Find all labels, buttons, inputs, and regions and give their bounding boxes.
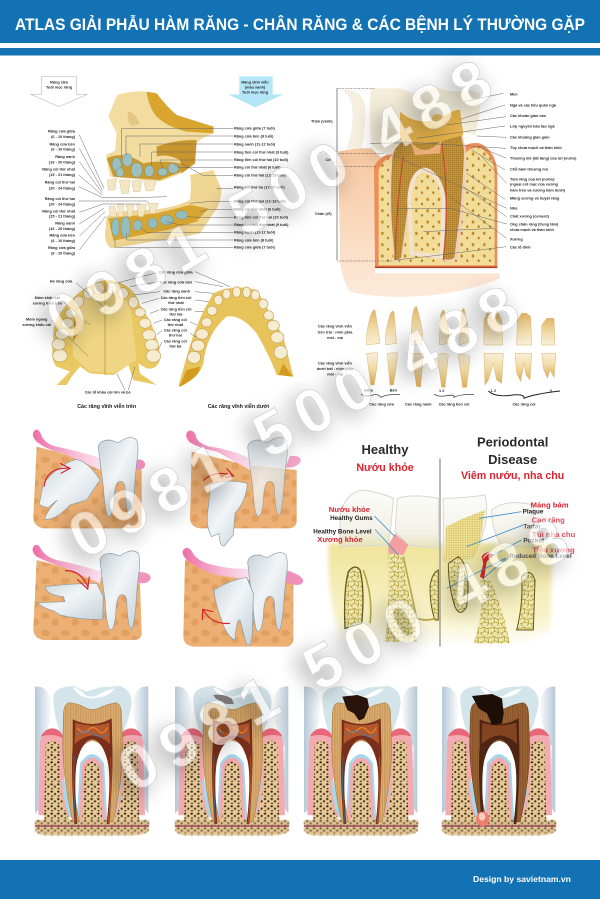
labels: cross-section left (311, 119, 333, 216)
labels: primary teeth: (16 - 20 tháng) (49, 227, 76, 231)
labels: tooth rows: Bên (390, 388, 398, 392)
panel: upper and lower dental arches (22, 270, 293, 410)
illustration: gum and jaw base (338, 148, 500, 297)
illustration: impaction case 4 (183, 548, 303, 647)
labels: permanent teeth: Răng cối thứ hai (12-13 tuổi) (234, 200, 286, 204)
labels: permanent teeth: Răng tiền cối thứ nhất (9 tuổi) (234, 150, 289, 154)
labels: healthy: Nướu khỏe (329, 505, 370, 514)
labels: arch teeth: thứ ba (169, 345, 182, 349)
labels: periodontal: Mảng bám (531, 500, 569, 509)
labels: periodontal: Plaque (523, 508, 544, 515)
labels: maxilla left: xương khẩu cái (22, 323, 51, 327)
watermark line 3: 0981 500 488 (108, 500, 590, 805)
header banner (0, 0, 600, 56)
illustration: healthy teeth (340, 490, 438, 642)
labels: permanent teeth: Răng tiền cối thứ hai (10 tuổi) (234, 215, 289, 219)
labels: permanent teeth: Răng cối thứ nhất (6 tuổi) (234, 207, 281, 211)
arrow: rotation (203, 468, 233, 481)
labels: primary teeth: Răng cối thứ nhất (42, 168, 76, 172)
panel: individual permanent teeth (317, 307, 560, 407)
labels: cross-section right: Tấm răng của lợi (nướu) (510, 177, 555, 181)
labels: primary teeth: (20 - 24 tháng) (49, 186, 76, 190)
labels: periodontal (509, 500, 576, 560)
labels: tooth rows: Các răng nanh (405, 403, 432, 407)
labels: cross-section right: Màng xương và huyệt răng (510, 197, 560, 201)
labels: periodontal: Cao răng (532, 515, 565, 524)
labels: cross-section right: Ống chân răng (trung tâm) (510, 221, 559, 226)
labels: cross-section right: Ngà và các tiểu quản ngà (510, 104, 557, 108)
labels: tooth rows: 1 2 (491, 389, 496, 393)
labels: arch teeth: Các răng tiền cối (161, 296, 191, 300)
labels: primary teeth: Răng cối thứ hai (45, 197, 75, 201)
labels: primary teeth: Răng cửa bên (49, 234, 76, 238)
labels: permanent teeth: Răng cửa giữa (7 tuổi) (234, 246, 276, 250)
watermark phone number (35, 41, 590, 805)
labels: arch teeth: Các răng cửa bên (160, 280, 193, 284)
labels: arch teeth: Các răng cối (164, 340, 187, 344)
labels: primary teeth: (15 - 21 tháng) (49, 215, 76, 219)
labels: cross-section right (510, 93, 577, 250)
illustration: mandible (105, 170, 222, 248)
illustration: impaction case 3 (33, 545, 151, 640)
watermark line 2: 0981 500 488 (58, 267, 540, 572)
labels: primary teeth: Răng cửa bên (49, 142, 76, 146)
labels: cross-section right: Chỗ bám thượng mô (510, 167, 549, 171)
arrow: rotation (65, 571, 89, 589)
arrow: permanent teeth: Tuổi mọc răng (242, 91, 269, 95)
illustration: upper teeth row (367, 307, 555, 345)
labels: cross-section right: Các khoản gian cầu (510, 114, 547, 118)
labels: healthy: Healthy Bone Level (313, 529, 372, 536)
illustration: healthy tooth section (35, 686, 149, 835)
labels: permanent teeth: Răng cửa giữa (7 tuổi) (234, 127, 276, 131)
arrow: permanent teeth (228, 76, 283, 107)
labels: maxilla left (22, 280, 73, 327)
labels: arch teeth: thứ nhất (168, 301, 184, 305)
labels: primary teeth: Răng nanh (55, 221, 76, 225)
labels: cross-section right: Men (510, 93, 518, 97)
labels: arch teeth: Các lỗ khẩu cái lớn và bé (85, 390, 131, 394)
illustration: tooth root (390, 127, 466, 262)
illustration: maxilla (52, 280, 161, 385)
labels: periodontal: Pocket (523, 538, 545, 545)
labels: cross-section right: chứa mạch và thần kinh (510, 228, 554, 232)
labels: primary teeth: Răng nanh (55, 155, 76, 159)
arrow: primary teeth: Răng sữa (50, 80, 69, 84)
arrow: rotation (202, 609, 230, 623)
labels: primary teeth: Răng cửa giữa (48, 130, 76, 134)
labels: periodontal: Reduced Bone Level (509, 553, 572, 560)
illustration: neighbouring tooth (342, 90, 365, 148)
caption: upper arch: Các răng vĩnh viễn trên (77, 403, 136, 410)
labels: permanent teeth: Răng nanh (11-12 tuổi) (234, 230, 276, 234)
labels: cross-section right: Nhú (510, 206, 518, 210)
illustration: impaction case 2 (186, 431, 301, 546)
labels: permanent teeth: Răng cối thứ hai (12-13 tuổi) (234, 174, 286, 178)
labels: primary teeth: Răng cửa giữa (48, 246, 76, 250)
labels: tooth rows: Giữa (364, 388, 374, 392)
brace (361, 391, 560, 398)
labels: tooth rows: Các răng vĩnh viễn (318, 362, 353, 366)
footer credit: Design by savietnam.vn (473, 874, 571, 884)
labels: cross-section right: (ngoại cốt mạc của xương (510, 182, 559, 186)
labels: tooth rows: dưới trái : nhìn phía (317, 367, 354, 371)
labels: cross-section right: Các lỗ đỉnh (510, 246, 531, 250)
labels: cross-section right: Thượng mô (tất tầng) của lợi (nướu) (510, 156, 577, 160)
arrow: permanent teeth: Răng vĩnh viễn (241, 80, 269, 84)
labels: primary teeth: (6 - 10 tháng) (51, 239, 76, 243)
panel: tooth cross-section anatomy (311, 87, 577, 297)
labels: arch teeth: Các răng cối (164, 329, 187, 333)
footer banner (0, 860, 600, 899)
labels: permanent teeth: Răng cửa bên (8 tuổi) (234, 134, 274, 138)
labels: arch teeth: Các răng cửa giữa (159, 270, 193, 274)
illustration: gum and bone layers (374, 143, 497, 267)
labels: arch teeth: thứ hai (169, 333, 182, 337)
panel: caries stages (35, 686, 556, 835)
illustration: periodontal teeth (443, 495, 535, 643)
heading: healthy: Healthy (362, 442, 409, 457)
leader lines (374, 512, 523, 588)
watermark line 1: 0981 500 488 (35, 41, 513, 354)
labels: permanent teeth: Răng cối thứ ba (17-25 tuổi) (234, 186, 285, 190)
illustration: pulp necrosis and abscess (442, 686, 556, 835)
labels: arch teeth (85, 270, 193, 394)
labels: maxilla left: Hố răng cửa (50, 280, 73, 284)
labels: primary teeth: (6 - 10 tháng) (51, 135, 76, 139)
labels: tooth rows: Các răng cửa (369, 403, 395, 407)
labels: healthy (313, 505, 373, 544)
labels: periodontal: Tartar (523, 523, 541, 530)
heading: healthy (356, 442, 414, 474)
arrow: primary teeth (31, 76, 87, 107)
labels: tooth rows: Các răng cối (513, 403, 535, 407)
labels: maxilla left: Mỏm ngang (26, 318, 48, 322)
illustration: impaction case 1 (33, 430, 145, 528)
arrow: permanent teeth: (màu xanh) (245, 85, 266, 89)
labels: tooth rows: 1 2 (439, 389, 444, 393)
labels: cross-section left: Thân (vành) (311, 119, 333, 123)
labels: primary teeth: Răng cối thứ hai (45, 181, 75, 185)
caption: lower arch: Các răng vĩnh viễn dưới (208, 403, 269, 410)
labels: tooth rows: môi - má (327, 336, 344, 340)
labels: arch teeth: Các răng nanh (163, 289, 191, 293)
brackets and dashed levels (337, 88, 393, 261)
panel: healthy vs periodontal disease (313, 435, 576, 647)
arrow: primary teeth: Tuổi mọc răng (46, 86, 73, 90)
labels: periodontal: Tiêu xương (532, 545, 575, 554)
labels: healthy: Xương khỏe (317, 535, 363, 544)
illustration: early enamel caries (175, 686, 289, 835)
labels: primary teeth: (16 - 20 tháng) (49, 160, 76, 164)
heading: periodontal disease (461, 435, 564, 482)
panel: impacted wisdom teeth (33, 430, 303, 647)
labels: tooth rows: trên trái : nhìn phía (318, 330, 353, 334)
labels: maxilla left: Mỏm khẩu cái (35, 296, 60, 300)
labels: permanent teeth (234, 127, 289, 250)
labels: cross-section left: Cổ (326, 158, 331, 162)
bone background (328, 543, 553, 647)
labels: cross-section right: Chất xương (cement) (510, 215, 550, 219)
labels: cross-section right: Các khoảng gian gian (510, 136, 550, 140)
labels: primary teeth: (20 - 24 tháng) (49, 203, 76, 207)
labels: primary teeth: (15 - 21 tháng) (49, 173, 76, 177)
labels: permanent teeth: Răng tiền cối thứ hai (10 tuổi) (234, 158, 289, 162)
illustration: crown (370, 87, 480, 155)
labels: tooth rows: Các răng vĩnh viễn (318, 324, 353, 328)
heading: periodontal disease: Periodontal (477, 435, 548, 450)
heading: periodontal disease: Disease (488, 452, 537, 467)
labels: tooth rows: 3 (550, 389, 552, 393)
labels: primary teeth: Răng cối thứ nhất (42, 209, 76, 213)
labels: primary teeth: (6 - 10 tháng) (51, 252, 76, 256)
panel: skull and jaw eruption chart (31, 76, 289, 256)
labels: healthy: Healthy Gums (330, 515, 373, 522)
heading: periodontal disease: Viêm nướu, nha chu (461, 470, 564, 482)
labels: periodontal: Túi nha chu (532, 530, 576, 539)
labels: cross-section right: Xương (510, 237, 523, 241)
labels: primary teeth: (6 - 10 tháng) (51, 148, 76, 152)
labels: cross-section left: Chân (rễ) (315, 212, 332, 216)
illustration: lower teeth row (367, 353, 556, 387)
labels: tooth rows (317, 324, 552, 407)
labels: arch teeth: Các răng cối (164, 318, 187, 322)
labels: permanent teeth: Răng cối thứ nhất (6 tuổi) (234, 166, 281, 170)
labels: cross-section right: Tủy chứa mạch và thần kinh (510, 146, 562, 150)
leader lines (79, 128, 233, 250)
labels: tooth rows: môi - má (327, 372, 344, 376)
illustration: skull upper jaw (106, 91, 214, 193)
labels: primary teeth (42, 130, 76, 256)
labels: tooth rows: Các răng tiền cối (439, 403, 469, 407)
leader lines (370, 93, 507, 260)
labels: permanent teeth: Răng nanh (11-12 tuổi) (234, 142, 276, 146)
arrow: rotation (44, 463, 70, 487)
labels: cross-section right: Lớp nguyên bào tạo ngà (510, 125, 555, 129)
divider (438, 458, 442, 647)
illustration: mandible arch (178, 287, 293, 387)
labels: permanent teeth: Răng cửa bên (8 tuổi) (234, 238, 274, 242)
labels: cross-section right: hàm trên và xương hàm dưới) (510, 188, 566, 192)
labels: arch teeth: thứ nhất (168, 323, 184, 327)
illustration: dentine caries (304, 686, 418, 835)
labels: arch teeth: thứ hai (170, 313, 182, 317)
labels: maxilla left: xương hàm trên (33, 301, 63, 305)
heading: healthy: Nướu khỏe (356, 462, 414, 474)
labels: permanent teeth: Răng tiền cối thứ nhất (9 tuổi) (234, 223, 289, 227)
labels: arch teeth: Các răng tiền cối (161, 308, 191, 312)
leader lines (52, 272, 230, 390)
